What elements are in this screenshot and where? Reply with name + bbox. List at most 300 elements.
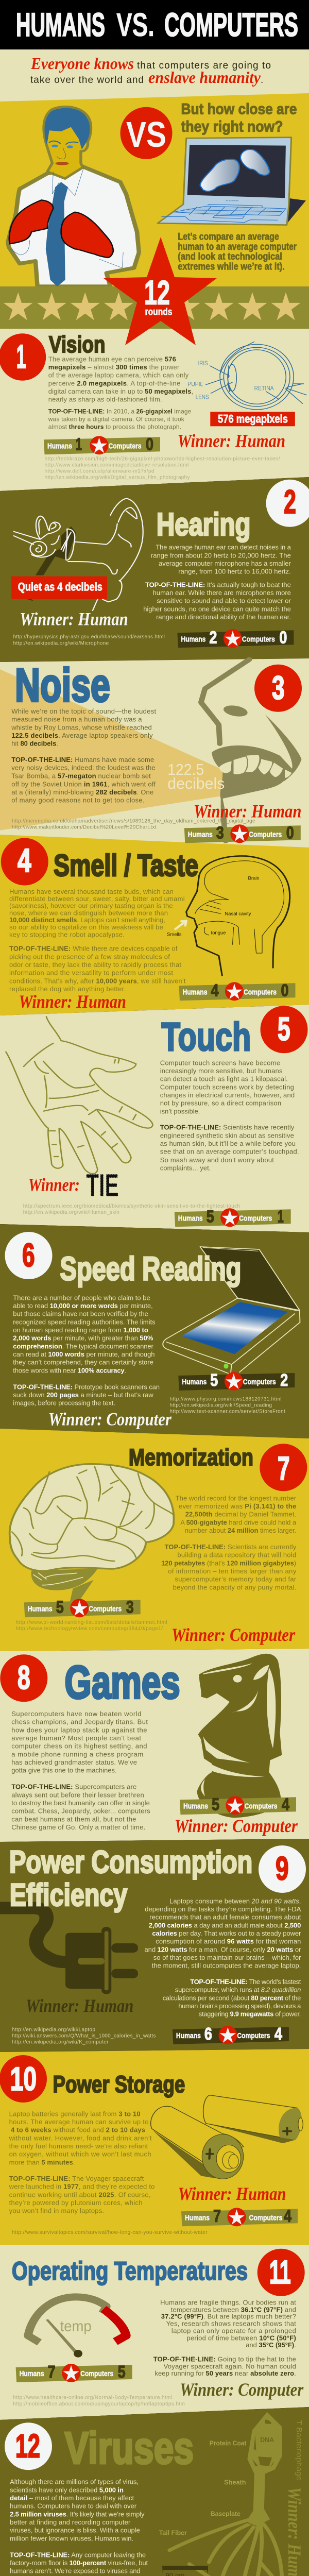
icon: T bacteriophage: Baseplate <box>211 2510 241 2517</box>
text: viruses body: TOP-OF-THE-LINE: Any computer leaving the <box>10 2551 146 2558</box>
scoreboard: humans 5 computers 1: Humans <box>178 1214 203 1223</box>
sources: touch <box>23 1204 240 1215</box>
text: vision body: The average human eye can perceive 576 <box>48 355 176 363</box>
scoreboard: humans 2 computers 0: Computers <box>242 635 275 643</box>
text: touch body: see that on an average computer’s touchpad. <box>160 1148 299 1156</box>
text: smell body: (savoriness), however our primary tasting organ is the <box>9 902 173 910</box>
text: temperatures body: Humans are fragile things. Our bodies run at <box>160 2298 296 2306</box>
badge: VS: VS <box>126 114 166 155</box>
scoreboard: humans 5 computers 1 <box>175 1207 291 1227</box>
text: smell body: replaced the dog with anything better. <box>9 985 126 993</box>
scoreboard: humans 5 computers 2: Computers <box>243 1378 276 1386</box>
heading: power consumption efficiency: Power Consumption <box>9 1844 252 1879</box>
text: storage body: Laptop batteries generally last from 3 to 10 <box>9 2110 141 2117</box>
text: power body: human brain’s processing speed), devours a <box>178 2002 301 2010</box>
text: temperatures body: laptop can only operate for a prolonged <box>171 2327 296 2334</box>
text: speed reading body <box>13 1294 160 1407</box>
text: noise body: whistle by Roy Lomas, whose whistle reached <box>11 723 152 731</box>
panel: speed reading <box>0 1224 309 1438</box>
icon: eye diagram: IRIS <box>198 360 208 367</box>
text: storage body: continue working until about 2025. Of course, <box>9 2191 151 2198</box>
text: touch body: isn’t possible. <box>160 1107 200 1115</box>
text: hearing body: TOP-OF-THE-LINE: It’s actually tough to beat the <box>145 581 291 588</box>
text: smell body: so our ability to capitalize on this weakness will be <box>9 923 163 931</box>
number badge 11: 11 <box>269 2253 291 2291</box>
scoreboard: humans 5 computers 3: Humans <box>28 1604 53 1613</box>
winner: tie <box>28 1168 119 1204</box>
heading: hearing: Hearing <box>157 507 250 543</box>
text: hearing body: human ear. While there are microphones more <box>153 589 291 597</box>
panel: noise <box>0 658 309 850</box>
text: smell body: information and the versatility to perform under most <box>9 969 173 977</box>
sources: power: http://en.wikipedia.org/wiki/Laptop <box>12 2027 95 2033</box>
sources: storage: http://www.survivaltopics.com/survival/how-long-can-you-survive-without-water <box>12 2230 208 2235</box>
text: power body: and 120 watts for a man. Of course, only 20 watts or <box>144 1945 301 1953</box>
text: touch body: engineered synthetic skin about as sensitive <box>160 1131 294 1139</box>
text: hearing body: range, from 100 hertz to 16,000 hertz. <box>178 568 291 575</box>
scoreboard: humans 2 computers 0: 2 <box>209 628 217 647</box>
number badge 7 <box>260 1444 307 1491</box>
text: how close <box>181 101 297 135</box>
text: memorization body: A 500-gigabyte hard drive could hold a <box>180 1518 297 1526</box>
sources: memorization: http://www.technologyreview.com/computing/38440/page1/ <box>16 1626 163 1632</box>
text: noise body: at a (literally) mind-blowing 282 decibels. One <box>11 788 153 796</box>
panel: hearing <box>0 477 309 662</box>
text: intro sentence: that computers are going to <box>137 60 271 71</box>
text: games body: combat. Chess, Jeopardy, poker... computers <box>11 1807 150 1815</box>
winner: human: Winner: Human <box>26 1995 133 2016</box>
text: viruses body: Although there are millions of types of virus, <box>10 2478 139 2486</box>
text: storage body <box>9 2110 154 2215</box>
text: intro sentence: . <box>261 75 263 86</box>
text: compare: Let’s compare an average <box>178 232 279 243</box>
text: power body: calories per day. That works out to a steady power <box>152 1929 301 1937</box>
text: power body: calculations per second (about 80 percent of the <box>163 1994 301 2002</box>
text: temperatures body <box>153 2298 296 2377</box>
sources: speed reading: http://en.wikipedia.org/wiki/Speed_reading <box>170 1403 272 1409</box>
text: temperatures body: temperatures between 36.1°C (97°F) and <box>171 2306 296 2313</box>
scoreboard: humans 5 computers 2: 2 <box>280 1370 288 1389</box>
scoreboard: humans 5 computers 3: 5 <box>56 1597 64 1616</box>
text: vision body: of the average laptop camera, which can only <box>48 371 189 379</box>
panel: introduction <box>0 49 309 287</box>
text: compare: (and look at technological <box>178 251 282 262</box>
scoreboard: humans 3 computers 0 <box>184 823 301 843</box>
scoreboard: humans 5 computers 3 <box>24 1597 141 1617</box>
callout: quiet as 4 decibels: Quiet as 4 decibels <box>18 580 102 593</box>
scoreboard: humans 6 computers 4 <box>173 2024 289 2044</box>
scoreboard: humans 5 computers 4: 5 <box>212 1794 219 1814</box>
text: touch body: TOP-OF-THE-LINE: Scientists have recently <box>160 1124 295 1131</box>
winner: computer: Winner: Computer <box>48 1409 172 1430</box>
text: viruses body: better at finding and recording computer <box>10 2518 131 2526</box>
scoreboard: humans 5 computers 4: Humans <box>183 1802 208 1810</box>
text: power body: consumption of around 96 watts for that woman <box>156 1938 301 1945</box>
text: games body: to destroy the best humanity can offer in single <box>11 1799 150 1807</box>
scoreboard: humans 6 computers 4: 6 <box>204 2024 212 2043</box>
badge: 12 rounds star: 12 <box>144 274 170 312</box>
text: memorization body: 22,500th decimal by Daniel Tammet. <box>185 1511 296 1518</box>
sources: noise: http://menmedia.co.uk/oldhamadvertiser/news/s/1089126_the_day_oldham_entered_the_digital_age <box>12 819 255 824</box>
text: viruses body: humans aren’t. We’re exposed to viruses and <box>10 2567 140 2575</box>
text: viruses body: humans. Computers have to deal with over <box>10 2502 137 2510</box>
text: vision body: nearly as sharp as old-fashioned film. <box>48 396 162 403</box>
text: noise body: off by the Soviet Union in 1961, which went off <box>11 780 156 788</box>
winner: human: Winner: Human <box>178 2183 286 2204</box>
text: intro sentence: take over the world and <box>30 75 144 86</box>
panel: operating temperatures <box>0 2245 309 2420</box>
text: games body: a mobile phone running a chess program <box>11 1750 143 1758</box>
icon: head cross-section: Smells <box>167 932 182 938</box>
sources: speed reading: http://www.physorg.com/news188120731.html <box>170 1396 281 1402</box>
text: how close: they right now? <box>181 118 283 135</box>
text: memorization body: ever memorized was Pi (3.141) to the <box>179 1502 296 1510</box>
winner: tie: Winner: <box>28 1175 80 1195</box>
text: storage body: hours. The average human can survive up to <box>9 2118 149 2126</box>
icon: temperature gauge: temp <box>60 2318 92 2335</box>
scoreboard: humans 7 computers 5: 5 <box>118 2362 126 2381</box>
heading: speed reading: Speed Reading <box>60 1250 241 1287</box>
icon: chess knight <box>197 1654 282 1818</box>
text: viruses body: 2.5 million viruses. It’s likely that we’re simply <box>10 2510 145 2518</box>
text: touch body: can detect a touch as light as 1 kilopascal. <box>160 1075 288 1083</box>
number badge 7: 7 <box>278 1450 290 1487</box>
sources: noise: http://www.makeitlouder.com/Decibel%20Level%20Chart.txt <box>12 825 157 831</box>
winner: tie: TIE <box>86 1168 119 1204</box>
number badge 10 <box>0 2055 47 2103</box>
text: storage body: without water. However, food and drink aren’t <box>9 2134 152 2142</box>
sources: hearing: http://en.wikipedia.org/wiki/Microphone <box>13 640 109 646</box>
text: hearing body: range and directional ability of the human ear. <box>156 613 291 621</box>
text: memorization body: The world record for the longest number <box>176 1494 297 1502</box>
scoreboard: humans 3 computers 0: Humans <box>188 830 213 839</box>
text: vision body: perceive 2.0 megapixels. A top-of-the-line <box>48 379 180 387</box>
text: speed reading body: they can’t comprehend, they can certainly store <box>13 1359 153 1366</box>
sources: speed reading: http://www.text-scanner.com/servlet/StoreFront <box>170 1409 285 1415</box>
scoreboard: humans 1 computers 0: Humans <box>47 442 72 450</box>
text: games body: computer chess on its highest setting, and <box>11 1742 147 1750</box>
text: compare <box>178 232 297 272</box>
text: memorization body: beyond the capacity of any puny mortal. <box>173 1583 296 1591</box>
text: viruses body: factory-room floor is 100-percent virus-free, but <box>10 2559 148 2567</box>
text: vision top of the line: almost three hours to process the photograph. <box>48 423 181 430</box>
winner: human: Winner: Human <box>177 430 285 451</box>
icon: document scanner <box>163 1247 300 1374</box>
number badge 8 <box>0 1654 47 1702</box>
panel: memorization <box>0 1429 309 1651</box>
text: smell body: odor or taste, they lack the ability to rapidly process that <box>9 961 181 969</box>
number badge 6 <box>5 1232 53 1279</box>
scale bar: 90 nm <box>162 2566 208 2576</box>
text: games body: always sent out before their lesser brethren <box>11 1791 144 1799</box>
scoreboard: humans 2 computers 0: 0 <box>279 628 287 647</box>
panel: power consumption <box>0 1839 309 2052</box>
heading: power consumption efficiency <box>9 1844 252 1912</box>
heading: operating temperatures: Operating Temperatures <box>12 2257 248 2285</box>
number badge 6: 6 <box>22 1236 35 1274</box>
sources: temperatures <box>13 2395 185 2407</box>
sources: vision: http://en.wikipedia.org/wiki/Digital_versus_film_photography <box>44 475 190 480</box>
sources: speed reading <box>170 1396 285 1415</box>
text: vision top of the line <box>48 408 192 430</box>
text: storage body: they’re powered by plutonium cores, which <box>9 2199 143 2207</box>
icon: ear anatomy <box>14 499 143 611</box>
header: title banner: HUMANS <box>16 6 105 43</box>
callout: 122.5 decibels: decibels <box>167 774 225 792</box>
text: vision top of the line: TOP-OF-THE-LINE: In 2010, a 26-gigapixel image <box>48 408 192 415</box>
text: intro sentence: Everyone knows <box>30 54 134 73</box>
text: smell body: key to stopping the robot apocalypse. <box>9 930 125 938</box>
text: temperatures body: TOP-OF-THE-LINE: Going to tip the hat to the <box>153 2355 296 2363</box>
icon: temperature gauge <box>28 2297 126 2358</box>
header: title banner: VS. <box>116 6 154 43</box>
text: smell body: picking out the presence of a few stray molecules of <box>9 953 170 960</box>
panel: vision <box>0 329 309 491</box>
text: temperatures body: keep running for 50 years near absolute zero. <box>154 2369 296 2377</box>
text: viruses body: scientists have only described 5,000 in <box>10 2486 124 2494</box>
icon: eye diagram <box>187 342 306 410</box>
number badge 9 <box>259 1845 306 1893</box>
icon: head cross-section: Brain <box>248 875 260 881</box>
text: speed reading body: recognized speed reading authorities. The limits <box>13 1318 156 1326</box>
icon: megaphone sound wedge <box>0 669 266 831</box>
callout: 122.5 decibels: 122.5 <box>167 760 204 778</box>
heading: memorization: Memorization <box>129 1444 253 1470</box>
text: touch body: increasingly more sensitive, but humans <box>160 1067 283 1075</box>
text: games body <box>11 1710 150 1831</box>
scoreboard: humans 5 computers 4: 4 <box>282 1794 290 1814</box>
scoreboard: humans 5 computers 3: Computers <box>89 1604 122 1613</box>
scoreboard: humans 4 computers 0: Computers <box>244 988 277 996</box>
number badge 1: 1 <box>16 338 26 375</box>
text: power body: recommends that an adult female consumes about <box>149 1913 301 1921</box>
text: games body: how does your laptop stack up against the <box>11 1726 147 1734</box>
scoreboard: humans 5 computers 4 <box>180 1794 296 1815</box>
icon: head cross-section: Nasal cavity <box>225 911 251 917</box>
number badge 1 <box>0 333 46 381</box>
text: noise body: 122.5 decibels. Average laptop speakers only <box>11 732 153 739</box>
number badge 4 <box>1 838 48 885</box>
text: temperatures body: Voyager spacecraft again. No human could <box>164 2362 296 2370</box>
scoreboard: humans 7 computers 4: 4 <box>284 2206 292 2225</box>
scoreboard: humans 7 computers 4: Humans <box>185 2213 210 2222</box>
scoreboard: humans 5 computers 3: 3 <box>126 1597 134 1616</box>
number badge 2 <box>266 480 309 527</box>
sources: memorization <box>16 1620 167 1632</box>
scoreboard: humans 6 computers 4: Computers <box>237 2031 270 2040</box>
text: smell body: differentiate between sour, sweet, salty, bitter and umami <box>9 895 185 903</box>
sources: temperatures: http://mobileoffice.about.com/od/usingyourlaptop/tp/hotlaptoptips.htm <box>13 2401 185 2407</box>
label: T Bacteriophage vertical: T Bacteriophage <box>295 2420 303 2481</box>
scoreboard: humans 1 computers 0: Computers <box>108 442 141 450</box>
text: viruses body: million fewer known viruses, Humans win. <box>10 2534 133 2542</box>
text: storage body: 4 to 6 weeks without food and 2 to 10 days <box>11 2126 145 2134</box>
text: storage body: on oxygen, without which we won’t last much <box>9 2150 151 2158</box>
text: temperatures body: 37.2°C (99°F). But are laptops much better? <box>161 2312 296 2320</box>
badge: 12 rounds star: rounds <box>145 307 172 317</box>
text: touch body <box>160 1059 299 1172</box>
panel: touch <box>0 1005 309 1232</box>
text: temperatures body: Yes, research shows research shows that <box>166 2319 296 2327</box>
panel: power storage <box>0 2049 309 2245</box>
sources: hearing: http://hyperphysics.phy-astr.gsu.edu/hbase/sound/earsens.html <box>13 634 165 640</box>
sources: vision: http://www.dell.com/us/p/alienware-m17x/pd <box>44 469 154 474</box>
scoreboard: humans 7 computers 4 <box>181 2206 298 2226</box>
text: games body: TOP-OF-THE-LINE: Supercomputers are <box>11 1783 136 1791</box>
heading: smell / taste: Smell / Taste <box>54 849 198 883</box>
text: speed reading body: can read at 1000 words per minute, and though <box>13 1350 155 1358</box>
scoreboard: humans 1 computers 0: 1 <box>76 434 82 453</box>
sources: noise <box>12 819 255 831</box>
scoreboard: humans 5 computers 1: Computers <box>239 1214 272 1223</box>
sources: vision <box>44 456 280 480</box>
text: vision body: megapixels – almost 300 times the power <box>48 363 180 371</box>
text: games body: chess champions, and Jeopardy titans. But <box>11 1718 148 1726</box>
number badge 5: 5 <box>278 1010 290 1047</box>
text: noise body: TOP-OF-THE-LINE: Humans have made some <box>11 756 154 764</box>
text: touch body: Computer touch screens work by detecting <box>160 1083 294 1091</box>
number badge 10: 10 <box>10 2060 37 2097</box>
text: games body: Supercomputers have now beaten world <box>11 1710 141 1718</box>
text: smell body: Humans have several thousand taste buds, which can <box>9 888 174 895</box>
text: vision top of the line: was taken by a digital camera. Of course, it took <box>48 416 185 423</box>
scoreboard: humans 4 computers 0: 4 <box>211 980 219 999</box>
number badge 9: 9 <box>276 1850 289 1887</box>
sources: power: http://wiki.answers.com/Q/What_is_1000_calories_in_watts <box>12 2033 156 2039</box>
scoreboard: humans 3 computers 0: Computers <box>249 830 282 839</box>
text: power body: TOP-OF-THE-LINE: The world’s fastest <box>190 1978 301 1986</box>
icon: human boxer <box>8 107 139 286</box>
text: speed reading body: comprehension. The typical document scanner <box>13 1342 153 1350</box>
heading: touch: Touch <box>162 1015 251 1059</box>
text: hearing body: sensitive to sound and able to detect lower or <box>157 597 291 605</box>
text: storage body: more than 5 minutes. <box>9 2158 75 2166</box>
text: hearing body <box>143 544 291 621</box>
icon: eye diagram: PUPIL <box>187 380 203 387</box>
heading: noise: Noise <box>15 659 110 711</box>
number badge 2: 2 <box>284 483 296 520</box>
scoreboard: humans 4 computers 0: 0 <box>281 980 288 999</box>
text: speed reading body: those words with near 100% accuracy. <box>13 1366 126 1374</box>
band: stars <box>0 286 309 329</box>
scoreboard: humans 6 computers 4: 4 <box>274 2024 282 2043</box>
scoreboard: humans 4 computers 0: Humans <box>182 988 207 996</box>
heading: games: Games <box>64 1657 180 1708</box>
text: power body: the moment, still outcomputes the average laptop. <box>152 1962 301 1970</box>
text: power body: supercomputer, which runs at 8.2 quadrillion <box>175 1986 301 1994</box>
text: games body: can beat humans at them all, but not the <box>11 1815 136 1823</box>
text: memorization body: of information – ten times larger than any <box>168 1567 297 1575</box>
icon: T bacteriophage: DNA <box>260 2436 274 2444</box>
text: noise body <box>11 707 156 804</box>
callout: 122.5 decibels <box>167 760 225 792</box>
text: memorization body <box>161 1494 297 1591</box>
panel: viruses <box>0 2407 309 2576</box>
text: viruses body: detail – most of them because they affect <box>10 2494 134 2502</box>
text: speed reading body: able to read 10,000 or more words per minute, <box>13 1302 153 1310</box>
icon: brain <box>10 1464 174 1601</box>
text: speed reading body: images, before processing the text. <box>13 1399 115 1407</box>
scoreboard: humans 3 computers 0: 0 <box>286 823 294 842</box>
number badge 3: 3 <box>272 669 285 706</box>
sources: touch: http://en.wikipedia.org/wiki/Human_skin <box>23 1210 119 1215</box>
winner: human: Winner: Human <box>19 991 126 1012</box>
text: viruses body: viruses, but ignorance is bliss. With a couple <box>10 2527 140 2534</box>
text: speed reading body: on human speed reading range from 1,000 to <box>13 1326 148 1334</box>
scoreboard: humans 5 computers 1: 1 <box>278 1207 284 1226</box>
scoreboard: humans 4 computers 0 <box>179 980 296 1001</box>
text: compare: extremes while we’re at it). <box>178 261 285 272</box>
icon: head cross-section <box>167 856 290 975</box>
text: smell body: nose, where we can distinguish between more than <box>9 909 168 917</box>
number badge 12: 12 <box>15 2428 40 2465</box>
number badge 3 <box>254 665 302 712</box>
text: temperatures body: period of time between 10°C (50°F) <box>186 2334 296 2342</box>
text: hearing body: average computer microphone has a smaller <box>159 560 291 567</box>
sources: temperatures: http://www.healthcare-online.org/Normal-Body-Temperature.html <box>13 2395 172 2401</box>
text: power body: depending on the tasks they’re completing. The FDA <box>145 1905 301 1913</box>
text: touch body: complaints... yet. <box>160 1164 211 1172</box>
scoreboard: humans 5 computers 2 <box>178 1370 295 1391</box>
text: memorization body: TOP-OF-THE-LINE: Scientists are currently <box>165 1543 297 1551</box>
winner: human: Winner: Human <box>20 608 128 629</box>
text: vision body <box>48 355 193 403</box>
text: power body: so of that goes to maintain our brains – which, for <box>153 1954 301 1961</box>
heading: vision: Vision <box>49 331 105 358</box>
text: games body: gotta give this one to the machines. <box>11 1767 117 1774</box>
text: storage body: you won’t find in many laptops. <box>9 2207 104 2215</box>
scoreboard: humans 5 computers 2: 5 <box>210 1370 218 1389</box>
text: noise body: measured noise from a human body was a <box>11 716 142 723</box>
scoreboard: humans 2 computers 0: Humans <box>181 635 205 643</box>
number badge 8: 8 <box>18 1659 30 1696</box>
sources: power: http://en.wikipedia.org/wiki/K_computer <box>12 2040 109 2045</box>
icon: T bacteriophage <box>159 2412 284 2576</box>
icon: hand <box>6 1016 153 1174</box>
text: touch body: Computer touch screens have become <box>160 1059 280 1066</box>
callout: 576 megapixels: 576 megapixels <box>218 413 288 426</box>
scoreboard: humans 5 computers 2: Humans <box>182 1378 207 1386</box>
text: smell body <box>9 888 186 993</box>
text: touch body: changes in electrical currents, however, and <box>160 1091 295 1099</box>
text: hearing body: higher sounds, no one device can quite match the <box>143 605 291 613</box>
icon: eye diagram: RETINA <box>254 384 274 392</box>
icon: T bacteriophage: Sheath <box>224 2479 246 2486</box>
scoreboard: humans 7 computers 4: Computers <box>249 2213 282 2222</box>
text: touch body: So mash away and don’t worry about <box>160 1156 274 1164</box>
scoreboard: humans 7 computers 5: Humans <box>20 2369 44 2378</box>
text: vision body: digital camera can take in up to 50 megapixels, <box>48 387 193 395</box>
badge: 12 rounds star <box>104 237 217 345</box>
number badge 11 <box>258 2249 305 2296</box>
text: noise body: Tsar Bomba, a 57-megaton nuclear bomb set <box>11 772 151 779</box>
text: power body: staggering 9.9 megawatts of power. <box>199 2010 301 2018</box>
text: memorization body: 120 petabytes (that’s 120 million gigabytes) <box>161 1559 296 1567</box>
sources: memorization: http://www.pi-world-ranking-list.com/lists/details/tammet.html <box>16 1620 167 1625</box>
scoreboard: humans 5 computers 1: 5 <box>207 1207 214 1226</box>
text: hearing body: range from about 20 hertz to 20,000 hertz. The <box>151 551 291 559</box>
text: noise body: of many good reasons not to get too close. <box>11 796 144 804</box>
text: games body: has achieved grandmaster status. We’ve <box>11 1758 137 1766</box>
text: hearing body: The average human ear can detect noises in a <box>156 544 291 551</box>
scoreboard: humans 5 computers 4: Computers <box>244 1802 277 1810</box>
text: power body: 2,000 calories a day and an adult male about 2,500 <box>149 1921 301 1929</box>
icon: laptop with boxing gloves <box>158 138 306 225</box>
icon: T bacteriophage: Protein Coat <box>210 2439 247 2447</box>
text: speed reading body: TOP-OF-THE-LINE: Prototype book scanners can <box>13 1383 160 1391</box>
callout: quiet as 4 decibels <box>11 577 107 599</box>
sources: power <box>12 2027 156 2045</box>
